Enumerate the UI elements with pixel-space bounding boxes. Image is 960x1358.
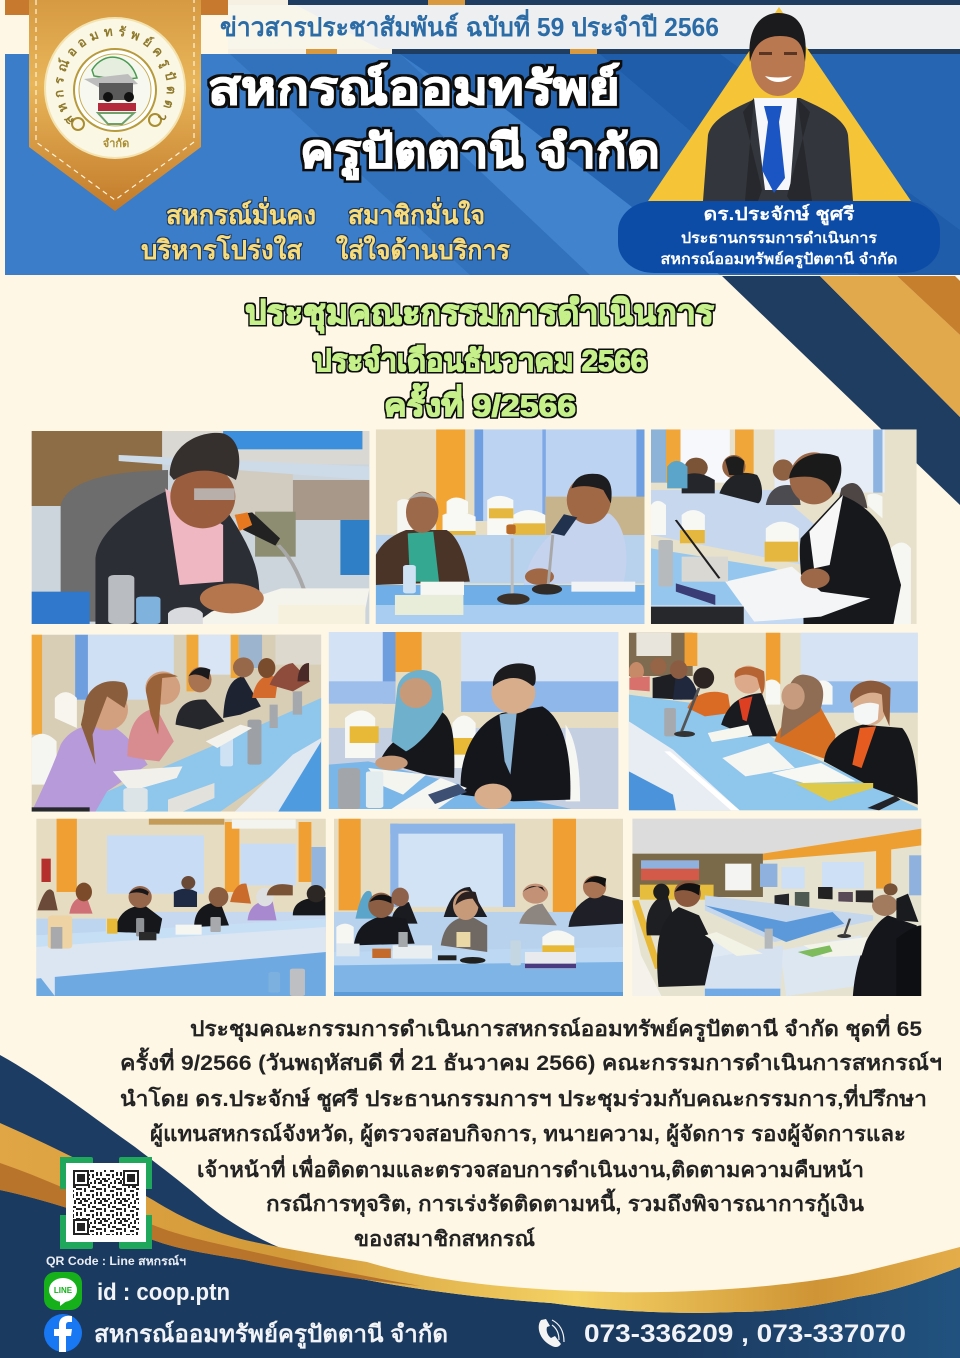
photo: two members speaking [376,429,645,624]
bottom wave decoration [0,1055,960,1358]
QR code [60,1157,152,1249]
slogans: บริหารโปร่งใส [141,234,302,265]
photo: women with face mask and documents [629,633,918,810]
meeting description paragraph: ผู้แทนสหกรณ์จังหวัด, ผู้ตรวจสอบกิจการ, ทนายความ, ผู้จัดการ รองผู้จัดการและ [150,1122,906,1148]
icon: telephone [539,1319,564,1347]
chairman name plate: สหกรณ์ออมทรัพย์ครูปัตตานี จำกัด [660,250,898,269]
QR caption: QR Code : Line สหกรณ์ฯ [46,1254,186,1268]
meeting description paragraph: นำโดย ดร.ประจักษ์ ชูศรี ประธานกรรมการฯ ประชุมร่วมกับคณะกรรมการ,ที่ปรึกษา [120,1083,927,1113]
photo: members at long table [651,429,917,624]
icon: Facebook [44,1314,82,1352]
slogans: ใส่ใจด้านบริการ [336,235,510,265]
meeting heading: ประชุมคณะกรรมการดำเนินการ [245,294,715,334]
logo suffix: จำกัด [103,137,129,150]
photo: wide view of participants left table [36,819,326,996]
meeting heading: ประจำเดือนธันวาคม 2566 [313,345,647,378]
ribbon tabs [5,0,228,15]
icon: LINE [44,1272,82,1310]
chairman portrait [648,7,911,201]
meeting description paragraph: ของสมาชิกสหกรณ์ [354,1227,536,1251]
photo row 1 [32,429,917,624]
photo: chairman writing at microphone [32,431,369,624]
photo: two women smiling [329,632,618,809]
meeting description paragraph: กรณีการทุจริต, การเร่งรัดติดตามหนี้, รวมถึงพิจารณาการกู้เงิน [266,1188,865,1218]
slogans: สมาชิกมั่นใจ [348,196,485,230]
meeting description paragraph: ประชุมคณะกรรมการดำเนินการสหกรณ์ออมทรัพย์ครูปัตตานี จำกัด ชุดที่ 65 [190,1013,922,1043]
chairman name plate: ดร.ประจักษ์ ชูศรี [704,203,855,226]
logo seal [44,17,186,159]
icon: LINE: LINE [54,1286,73,1295]
slogans [141,196,510,265]
photo: wide view of participants centre table [334,819,623,996]
main title [208,62,660,180]
photo row 3 [36,819,921,996]
telephone numbers: 073-336209 , 073-337070 [584,1320,906,1348]
chairman name plate: ประธานกรรมการดำเนินการ [681,229,878,247]
Facebook page name: สหกรณ์ออมทรัพย์ครูปัตตานี จำกัด [94,1320,448,1349]
decorative diagonal bands, upper right [722,276,960,505]
main title: สหกรณ์ออมทรัพย์ [208,62,620,114]
photo row 2 [32,632,918,812]
meeting description paragraph [120,1013,942,1251]
photo: women with documents at blue table [32,635,321,812]
chairman name plate [618,201,940,273]
meeting heading [245,294,715,423]
gold ribbon with logo [29,0,201,211]
main title: ครูปัตตานี จำกัด [300,125,660,180]
LINE id: id : coop.ptn [97,1279,230,1306]
top strip with diagonal gold accents [228,0,960,54]
photo: hall with U-shaped table [632,819,921,996]
meeting description paragraph: ครั้งที่ 9/2566 (วันพฤหัสบดี ที่ 21 ธันวาคม 2566) คณะกรรมการดำเนินการสหกรณ์ฯ [120,1047,942,1075]
header blue panel [5,54,960,275]
slogans: สหกรณ์มั่นคง [166,196,316,230]
meeting heading: ครั้งที่ 9/2566 [384,383,576,423]
newsletter issue line: ข่าวสารประชาสัมพันธ์ ฉบับที่ 59 ประจำปี 2566 [220,8,719,42]
meeting description paragraph: เจ้าหน้าที่ เพื่อติดตามและตรวจสอบการดำเนินงาน,ติดตามความคืบหน้า [197,1154,864,1182]
